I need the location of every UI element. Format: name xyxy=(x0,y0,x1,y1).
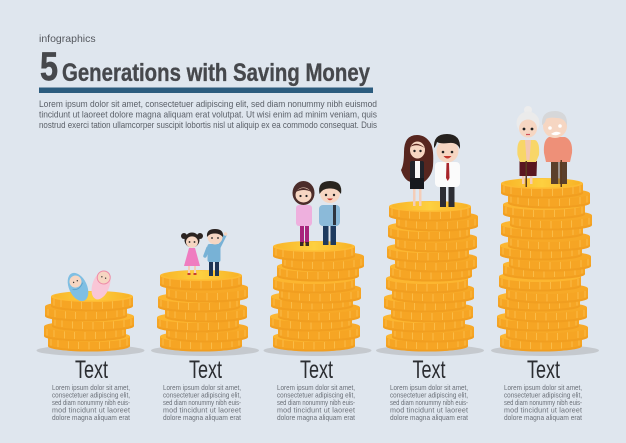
column 2 label and copy: Text xyxy=(189,356,222,384)
column 4 label and copy: consectetuer adipiscing elit, xyxy=(390,392,468,400)
column 3 label and copy: Lorem ipsum dolor sit amet, xyxy=(277,384,355,392)
title: Generations with Saving Money xyxy=(62,59,370,87)
column 3 label and copy: Text xyxy=(300,356,333,384)
intro paragraph: Lorem ipsum dolor sit amet, consectetuer adipiscing elit, sed diam nonummy nibh euismod xyxy=(39,98,377,109)
column 4 label and copy: Text xyxy=(412,356,446,384)
intro paragraph: tincidunt ut laoreet dolore magna aliquam erat volutpat. Ut wisi enim ad minim veniam, quis xyxy=(39,108,377,120)
column 5 label and copy: dolore magna aliquam erat xyxy=(504,414,582,422)
column 5 label and copy: Text xyxy=(527,356,560,384)
kicker: infographics: infographics xyxy=(39,33,96,45)
grandmother xyxy=(516,106,540,187)
column 2 label and copy xyxy=(163,356,242,422)
column 3 label and copy: dolore magna aliquam erat xyxy=(277,414,355,422)
girl child xyxy=(181,232,203,275)
column 2 label and copy: dolore magna aliquam erat xyxy=(163,414,241,422)
boy child xyxy=(205,229,227,276)
teen boy xyxy=(319,181,341,245)
grandparents xyxy=(516,106,572,187)
column 1 label and copy: dolore magna aliquam erat xyxy=(52,414,130,422)
column 1 label and copy: Text xyxy=(75,356,108,384)
column 2 label and copy: Lorem ipsum dolor sit amet, xyxy=(163,384,241,392)
column 1 label and copy xyxy=(52,356,131,422)
column 2 label and copy: sed diam nonummy nibh euis- xyxy=(163,399,242,407)
title xyxy=(40,45,370,89)
teen girl xyxy=(292,181,314,246)
column 3 label and copy xyxy=(277,356,356,422)
intro paragraph xyxy=(39,98,377,130)
column 4 label and copy: dolore magna aliquam erat xyxy=(390,414,468,422)
grandfather xyxy=(542,111,572,187)
column 3 label and copy: mod tincidunt ut laoreet xyxy=(277,406,355,414)
column 5 label and copy: Lorem ipsum dolor sit amet, xyxy=(504,384,582,392)
column 5 label and copy xyxy=(504,356,583,422)
column 5 label and copy: consectetuer adipiscing elit, xyxy=(504,392,582,400)
coin stack 5 xyxy=(497,178,592,351)
column 1 label and copy: Lorem ipsum dolor sit amet, xyxy=(52,384,130,392)
column 1 label and copy: consectetuer adipiscing elit, xyxy=(52,392,130,400)
column 4 label and copy: mod tincidunt ut laoreet xyxy=(390,406,468,414)
column 3 label and copy: sed diam nonummy nibh euis- xyxy=(277,399,356,407)
coin stack 4 xyxy=(383,201,478,351)
column 4 label and copy xyxy=(390,356,469,422)
man xyxy=(434,134,460,207)
column 5 label and copy: mod tincidunt ut laoreet xyxy=(504,406,582,414)
woman xyxy=(401,135,433,206)
baby in pink wrap xyxy=(88,268,114,302)
column 2 label and copy: consectetuer adipiscing elit, xyxy=(163,392,241,400)
ground shadows xyxy=(36,345,599,356)
column 5 label and copy: sed diam nonummy nibh euis- xyxy=(504,399,583,407)
column 2 label and copy: mod tincidunt ut laoreet xyxy=(163,406,241,414)
column 1 label and copy: sed diam nonummy nibh euis- xyxy=(52,399,131,407)
children xyxy=(181,229,227,276)
coin stack 2 xyxy=(157,270,248,351)
coin stack 3 xyxy=(270,241,364,351)
column 4 label and copy: Lorem ipsum dolor sit amet, xyxy=(390,384,468,392)
intro paragraph: nostrud exerci tation ullamcorper suscipit lobortis nisl ut aliquip ex ea commodo consequat. Duis xyxy=(39,119,377,130)
teenagers xyxy=(292,181,341,246)
column 4 label and copy: sed diam nonummy nibh euis- xyxy=(390,399,469,407)
title: 5 xyxy=(40,45,58,89)
babies xyxy=(64,268,114,304)
baby in blue wrap xyxy=(64,270,92,304)
title underline bar xyxy=(39,88,373,93)
coin stack 1 xyxy=(44,291,134,351)
column 3 label and copy: consectetuer adipiscing elit, xyxy=(277,392,355,400)
adults xyxy=(401,134,460,207)
column 1 label and copy: mod tincidunt ut laoreet xyxy=(52,406,130,414)
